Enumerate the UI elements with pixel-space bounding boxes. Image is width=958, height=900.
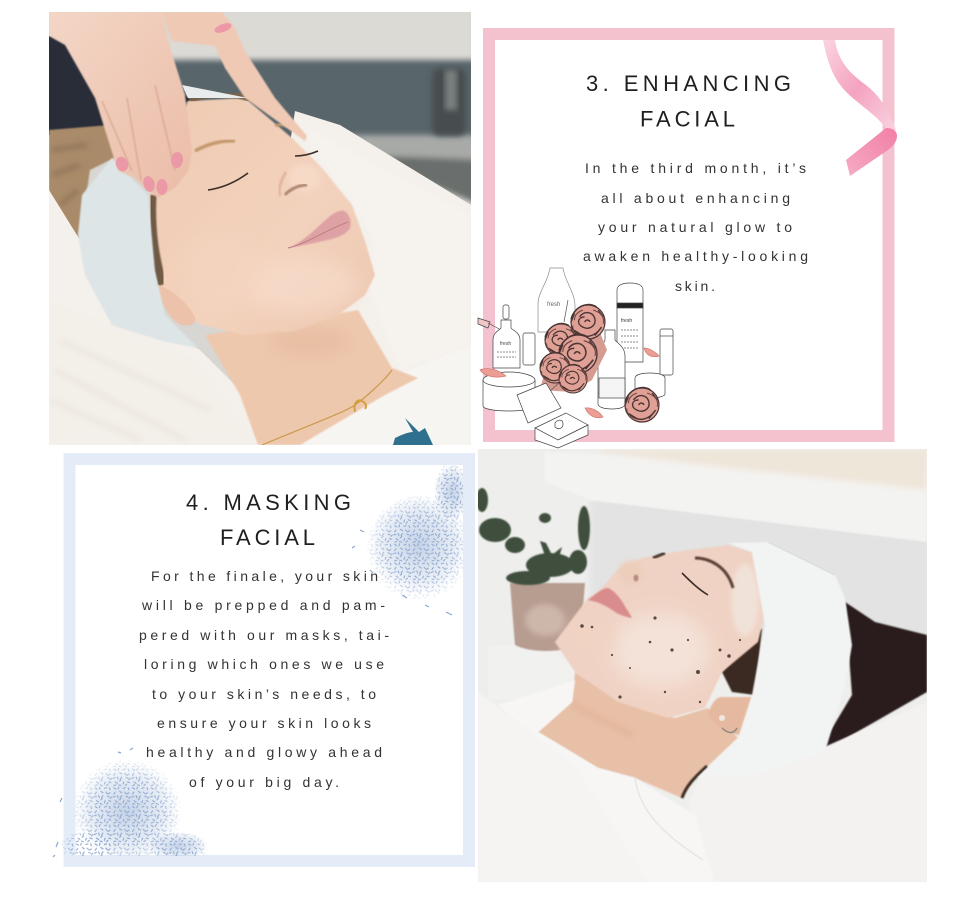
ear — [708, 697, 752, 735]
hair at temple — [722, 628, 762, 695]
illustration: skincare products and roses: fresh — [547, 302, 560, 308]
decoration: blue petal cluster, top right — [352, 462, 471, 615]
hair — [49, 124, 114, 239]
shirt — [258, 345, 471, 445]
mask speckles — [580, 616, 741, 703]
heading — [186, 490, 351, 550]
towel under head — [49, 111, 471, 445]
body text: skin. — [675, 278, 715, 294]
table and pot — [488, 645, 578, 700]
headband — [697, 542, 852, 778]
hair — [822, 602, 927, 752]
headband — [78, 158, 198, 348]
nails — [114, 21, 233, 195]
heading: 3. ENHANCING — [586, 71, 791, 96]
bottom towel — [822, 730, 863, 752]
masked face — [555, 545, 765, 718]
panel: 4. Masking Facial — [53, 459, 471, 864]
body text: your natural glow to — [598, 219, 792, 235]
plant — [476, 488, 590, 585]
body text: will be prepped and pam- — [141, 597, 385, 613]
body text: In the third month, it’s — [585, 160, 806, 176]
body text: healthy and glowy ahead — [146, 744, 382, 760]
neck — [205, 310, 418, 445]
body text: pered with our masks, tai- — [139, 627, 389, 643]
heading: 4. MASKING — [186, 490, 351, 515]
body text: For the finale, your skin — [151, 568, 378, 584]
brows and eyes — [195, 141, 235, 151]
heading: FACIAL — [640, 106, 735, 132]
body text: ensure your skin looks — [157, 715, 371, 731]
shirt collar — [498, 680, 715, 882]
panel frame — [70, 459, 469, 861]
body text: to your skin’s needs, to — [152, 686, 376, 702]
nose — [290, 166, 318, 190]
icon: pink ribbon — [823, 40, 897, 176]
illustration: skincare products and roses — [478, 268, 673, 448]
body text: loring which ones we use — [144, 656, 384, 672]
illustration: skincare products and roses: fresh — [621, 318, 632, 324]
brow, eye, nose, lips — [695, 558, 733, 588]
illustration: skincare products and roses: fresh — [500, 341, 511, 347]
ear — [158, 285, 195, 326]
body text — [583, 160, 808, 294]
hand main — [49, 12, 192, 198]
photo: hands massaging client's forehead — [49, 12, 480, 445]
left towel — [478, 692, 648, 882]
hair line — [190, 94, 252, 100]
panel frame — [489, 34, 888, 436]
decoration: blue petal cluster, bottom left — [53, 748, 208, 864]
body text: all about enhancing — [601, 190, 790, 206]
face — [150, 98, 375, 335]
body text: of your big day. — [189, 774, 339, 790]
heading: FACIAL — [220, 525, 315, 550]
body text: awaken healthy-looking — [583, 248, 808, 264]
lips — [288, 211, 351, 248]
photo: client wearing facial mask — [476, 449, 930, 882]
neck — [538, 672, 738, 798]
heading — [586, 71, 791, 132]
panel: 3. Enhancing Facial — [478, 34, 897, 448]
body text — [139, 568, 389, 790]
